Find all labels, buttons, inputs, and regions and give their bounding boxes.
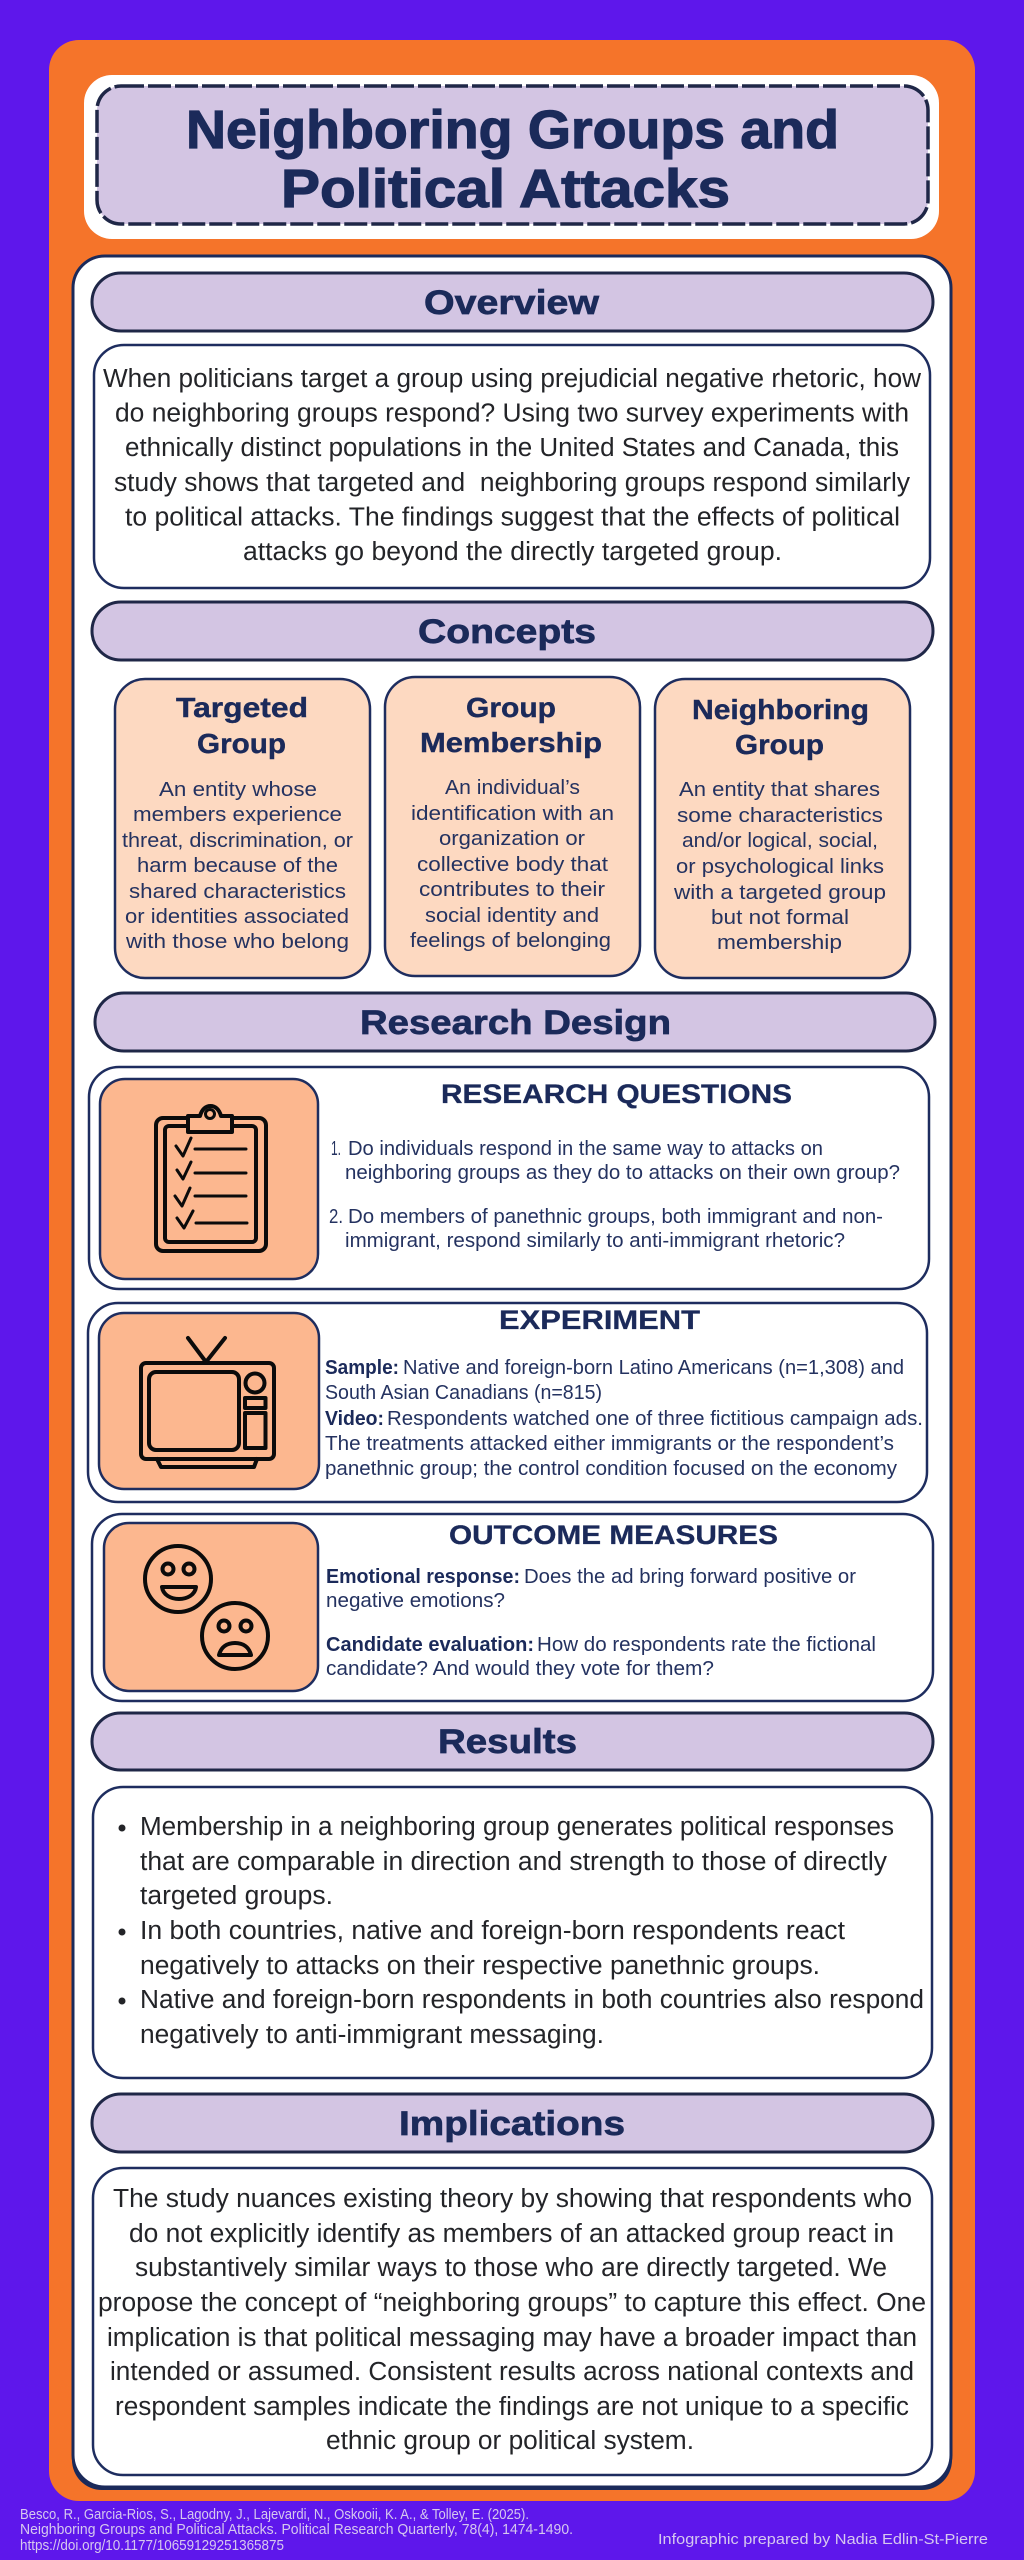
card: Neighboring Group: and/or logical, social, [682, 829, 878, 852]
heading: Results [92, 1713, 933, 1770]
panel: results text: In both countries, native and foreign-born respondents react [140, 1917, 845, 1945]
card: Group Membership: Membership [420, 727, 602, 758]
card: Targeted Group: threat, discrimination, or [122, 829, 353, 852]
research question list: 1. [331, 1137, 341, 1160]
card: Group Membership: Group [466, 692, 556, 723]
experiment text: Native and foreign-born Latino Americans (n=1,308) and [403, 1356, 904, 1379]
panel: implications text: substantively similar ways to those who are directly targeted. We [135, 2254, 887, 2282]
card: Neighboring Group: some characteristics [677, 804, 883, 827]
card: Targeted Group: or identities associated [125, 905, 349, 928]
card: Targeted Group: harm because of the [137, 854, 338, 877]
heading: experiment: EXPERIMENT [499, 1305, 701, 1335]
panel: implications text: The study nuances existing theory by showing that respondents who [113, 2185, 912, 2213]
panel: implications text: ethnic group or political system. [326, 2427, 694, 2455]
card: Targeted Group: An entity whose [159, 778, 317, 801]
outcome text: Does the ad bring forward positive or [524, 1565, 856, 1588]
card: Neighboring Group: Group [735, 729, 824, 760]
research question list: immigrant, respond similarly to anti-immigrant rhetoric? [345, 1229, 845, 1252]
card: Neighboring Group: with a targeted group [673, 881, 886, 904]
panel: results text: negatively to anti-immigrant messaging. [140, 2021, 604, 2049]
panel: overview text: do neighboring groups respond? Using two survey experiments with [115, 400, 909, 428]
panel: results text [93, 1787, 932, 2078]
card: Targeted Group [115, 679, 370, 978]
card: Neighboring Group: membership [717, 931, 842, 954]
heading: Overview [92, 273, 933, 331]
research question list [329, 1137, 900, 1252]
icon: clipboard [156, 1106, 266, 1251]
heading: Results: Results [438, 1723, 577, 1761]
experiment text [325, 1356, 923, 1480]
card: Targeted Group: with those who belong [125, 930, 349, 953]
heading: Overview: Overview [424, 284, 600, 322]
experiment text: Video: [325, 1407, 384, 1430]
card: Neighboring Group: but not formal [711, 906, 849, 929]
panel: research questions [89, 1067, 929, 1289]
card: Neighboring Group: An entity that shares [679, 778, 880, 801]
card: Targeted Group: Targeted [176, 692, 308, 723]
heading: Implications: Implications [399, 2105, 625, 2143]
panel: overview text: attacks go beyond the directly targeted group. [243, 538, 782, 566]
research question list: neighboring groups as they do to attacks on their own group? [345, 1161, 900, 1184]
card: Group Membership: social identity and [425, 904, 599, 927]
panel: main white content [72, 256, 952, 2490]
heading: outcome measures: OUTCOME MEASURES [449, 1520, 778, 1550]
panel: implications text: propose the concept of “neighboring groups” to capture this effect. One [98, 2289, 926, 2317]
heading: Concepts [92, 602, 933, 660]
panel: overview text: ethnically distinct populations in the United States and Canada, this [125, 434, 899, 462]
experiment text: South Asian Canadians (n=815) [325, 1381, 602, 1404]
panel: implications text [93, 2168, 932, 2475]
outcome text: negative emotions? [326, 1589, 505, 1612]
experiment text: Respondents watched one of three fictitious campaign ads. [387, 1407, 923, 1430]
outcome text: Emotional response: [326, 1565, 520, 1588]
title text: Political Attacks [281, 159, 730, 219]
citation: Besco, R., Garcia-Rios, S., Lagodny, J., Lajevardi, N., Oskooii, K. A., & Tolley, E. (2025). [20, 2507, 529, 2523]
card: Targeted Group: Group [197, 728, 286, 759]
panel: experiment [88, 1303, 927, 1502]
heading: Implications [92, 2094, 933, 2152]
card: Neighboring Group: Neighboring [692, 694, 869, 725]
card: Group Membership: identification with an [411, 802, 614, 825]
card: Targeted Group: members experience [133, 803, 342, 826]
panel: results text: targeted groups. [140, 1882, 333, 1910]
outcome text: candidate? And would they vote for them? [326, 1657, 714, 1680]
experiment text: Sample: [325, 1356, 399, 1379]
outcome text: Candidate evaluation: [326, 1633, 534, 1656]
panel: results text: Membership in a neighboring group generates political responses [140, 1813, 894, 1841]
card: Group Membership: An individual’s [445, 776, 580, 799]
panel: implications text: do not explicitly identify as members of an attacked group react in [129, 2220, 894, 2248]
panel: implications text: intended or assumed. Consistent results across national contexts and [110, 2358, 914, 2386]
panel: results text: that are comparable in direction and strength to those of directly [140, 1848, 887, 1876]
heading: Research Design [95, 993, 935, 1051]
research question list: 2. [329, 1205, 343, 1228]
panel: implications text: respondent samples indicate the findings are not unique to a specific [115, 2393, 909, 2421]
outcome text: How do respondents rate the fictional [537, 1633, 876, 1656]
panel: results text: negatively to attacks on their respective panethnic groups. [140, 1952, 820, 1980]
card: Targeted Group: shared characteristics [129, 880, 346, 903]
heading: Research Design: Research Design [360, 1004, 671, 1042]
panel: implications text: implication is that political messaging may have a broader impact than [107, 2324, 917, 2352]
citation: https://doi.org/10.1177/10659129251365875 [20, 2538, 284, 2554]
card: Group Membership: feelings of belonging [410, 929, 611, 952]
panel: overview text: to political attacks. The findings suggest that the effects of political [125, 503, 900, 531]
outcome text [326, 1565, 876, 1680]
card: Group Membership: contributes to their [419, 878, 605, 901]
heading: research questions: RESEARCH QUESTIONS [441, 1079, 792, 1109]
icon: television [141, 1338, 274, 1467]
card: Neighboring Group: or psychological links [676, 855, 884, 878]
research question list: Do individuals respond in the same way to attacks on [348, 1137, 823, 1160]
title text: Neighboring Groups and [186, 100, 839, 160]
panel: overview text: study shows that targeted and neighboring groups respond similarly [114, 469, 910, 497]
title block [84, 75, 939, 239]
research question list: Do members of panethnic groups, both immigrant and non- [348, 1205, 883, 1228]
citation: Neighboring Groups and Political Attacks. Political Research Quarterly, 78(4), 1474-1490. [20, 2522, 573, 2538]
heading: Concepts: Concepts [418, 613, 596, 651]
experiment text: The treatments attacked either immigrants or the respondent’s [325, 1432, 894, 1455]
panel: overview text [94, 345, 930, 588]
card: Neighboring Group [655, 679, 910, 978]
credit: Infographic prepared by Nadia Edlin-St-Pierre [658, 2532, 988, 2548]
panel: overview text: When politicians target a group using prejudicial negative rhetoric, how [103, 365, 922, 393]
title text [186, 100, 839, 219]
icon: happy and sad faces [145, 1546, 268, 1669]
card: Group Membership: collective body that [417, 853, 608, 876]
panel: outcome measures [92, 1514, 933, 1701]
citation [20, 2507, 573, 2554]
experiment text: panethnic group; the control condition focused on the economy [325, 1457, 898, 1480]
card: Group Membership [385, 677, 640, 976]
panel: results text: Native and foreign-born respondents in both countries also respond [140, 1986, 924, 2014]
card: Group Membership: organization or [439, 827, 585, 850]
